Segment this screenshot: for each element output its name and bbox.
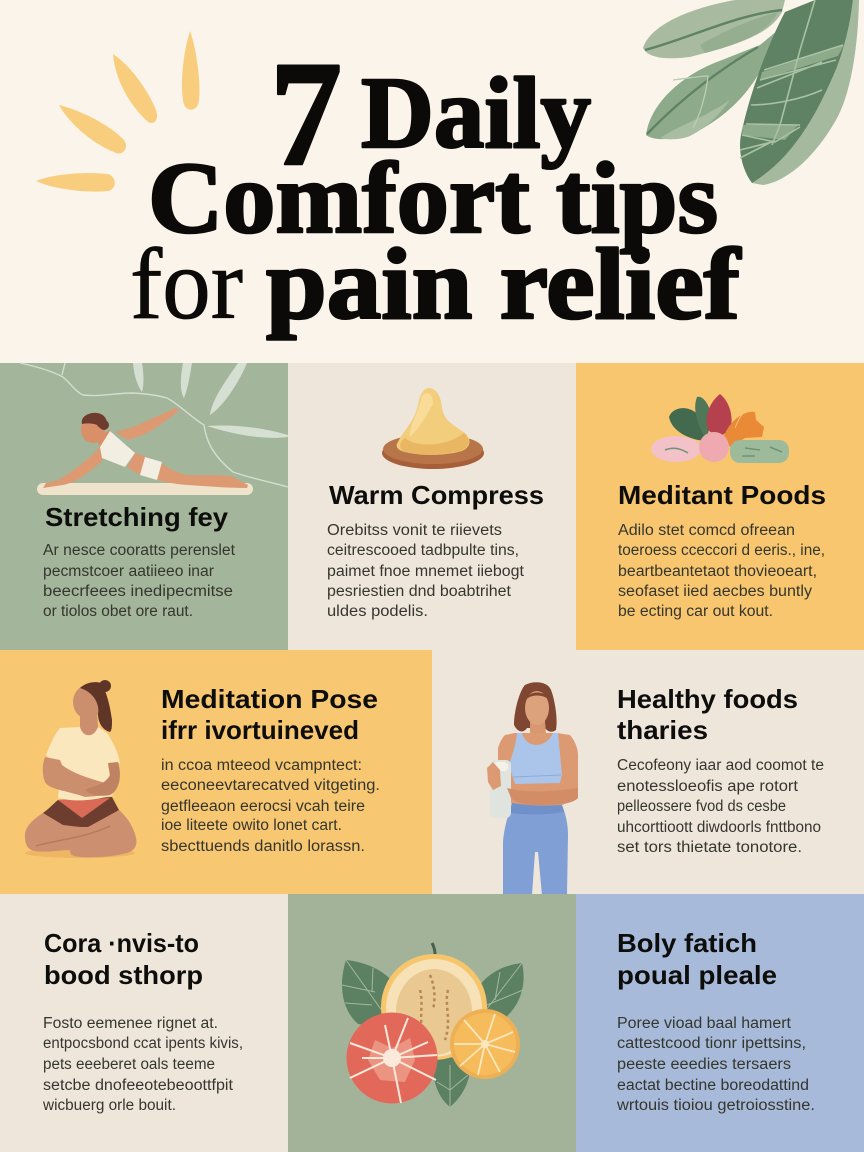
heading: stretching: Stretching fey bbox=[45, 502, 229, 532]
decorative sun rays bbox=[36, 31, 200, 192]
icon: leaves and food pile bbox=[651, 394, 789, 463]
icon: fruit and leaves bbox=[342, 943, 524, 1107]
body text: meditation pose: in ccoa mteeod vcampntect: bbox=[161, 757, 362, 774]
body text: stretching bbox=[43, 542, 236, 620]
body text: meditation pose: ioe liteete owito lonet cart. bbox=[161, 817, 342, 834]
body text: warm compress: pesriestien dnd boabtrihet bbox=[327, 583, 512, 600]
heading: coranvisto: Cora ·nvis-to bbox=[44, 928, 199, 958]
body text: coranvisto: Fosto eemenee rignet at. bbox=[43, 1015, 218, 1032]
body text: warm compress bbox=[327, 522, 525, 620]
body text: healthy foods: uhcorttioott diwdoorls fnttbono bbox=[617, 819, 821, 836]
body text: healthy foods: enotessloeofis ape rotort bbox=[617, 778, 799, 795]
illustration: seated meditating woman bbox=[25, 680, 136, 858]
body text: healthy foods bbox=[617, 757, 824, 856]
body text: healthy foods: pelleossere fvod ds cesbe bbox=[617, 798, 786, 815]
body text: coranvisto: setcbe dnofeeotebeoottfpit bbox=[43, 1077, 234, 1094]
heading: body fatich: Boly fatich bbox=[617, 928, 757, 958]
body text: meditant foods: beartbeantetaot thovieoeart, bbox=[618, 563, 817, 580]
body text: coranvisto bbox=[42, 1015, 243, 1114]
body text: stretching: pecmstcoer aatiieeo inar bbox=[43, 563, 214, 580]
body text: healthy foods: set tors thietate tonotore. bbox=[617, 839, 802, 856]
illustration: stretching woman on mat bbox=[37, 408, 253, 495]
title bbox=[130, 31, 741, 341]
body text: healthy foods: Cecofeony iaar aod coomot te bbox=[617, 757, 824, 774]
body text: body fatich: peeste eeedies tersaers bbox=[617, 1056, 791, 1073]
panel: stretching bbox=[0, 363, 288, 650]
heading: coranvisto: bood sthorp bbox=[44, 960, 203, 990]
body text: stretching: Ar nesce cooratts perenslet bbox=[43, 542, 236, 559]
body text: meditant foods: seofaset iied aecbes buntly bbox=[618, 583, 812, 600]
heading: meditation pose: ifrr ivortuineved bbox=[161, 715, 359, 745]
heading: meditant foods: Meditant Poods bbox=[618, 480, 826, 510]
heading: meditation pose: Meditation Pose bbox=[161, 684, 378, 714]
body text: stretching: or tiolos obet ore raut. bbox=[43, 603, 193, 620]
body text: body fatich: cattestcood tionr ipettsins, bbox=[617, 1035, 806, 1052]
body text: body fatich: wrtouis tioiou getroiosstine. bbox=[616, 1097, 815, 1114]
title: Daily bbox=[361, 57, 591, 170]
body text: warm compress: paimet fnoe mnemet iiebogt bbox=[327, 563, 525, 580]
body text: warm compress: ceitrescooed tadbpulte tins, bbox=[327, 542, 519, 559]
body text: body fatich: eactat bectine boreodattind bbox=[617, 1077, 809, 1094]
heading: meditation pose bbox=[161, 684, 378, 745]
icon: warm compress on wooden board bbox=[382, 388, 484, 469]
body text: body fatich: Poree vioad baal hamert bbox=[617, 1015, 792, 1032]
title: pain relief bbox=[266, 228, 741, 341]
heading: coranvisto bbox=[44, 928, 203, 990]
body text: meditation pose: getfleeaon eerocsi vcah teire bbox=[161, 798, 365, 815]
panel: healthy foods bbox=[432, 650, 864, 895]
body text: meditation pose bbox=[161, 757, 380, 855]
title: Comfort tips bbox=[148, 142, 718, 255]
body text: warm compress: uldes podelis. bbox=[327, 603, 428, 620]
body text: meditation pose: eeconeevtarecatved vitgeting. bbox=[161, 777, 380, 794]
illustration: standing woman with water bottle bbox=[487, 682, 578, 895]
heading: body fatich bbox=[617, 928, 777, 990]
heading: healthy foods: Healthy foods bbox=[617, 684, 798, 714]
body text: warm compress: Orebitss vonit te riievets bbox=[327, 522, 502, 539]
title: 7 bbox=[270, 31, 342, 197]
body text: body fatich bbox=[616, 1015, 815, 1114]
body text: meditation pose: sbecttuends danitlo lorassn. bbox=[161, 838, 365, 855]
body text: meditant foods: be ecting car out kout. bbox=[618, 603, 773, 620]
body text: coranvisto: entpocsbond ccat ipents kivis, bbox=[43, 1035, 243, 1052]
heading: warm compress: Warm Compress bbox=[329, 480, 544, 510]
decorative leaves bbox=[643, 0, 859, 185]
panel: meditation pose bbox=[0, 650, 432, 894]
heading: healthy foods bbox=[617, 684, 798, 745]
heading: healthy foods: tharies bbox=[617, 715, 708, 745]
body text: meditant foods: toeroess cceccori d eeris., ine, bbox=[618, 542, 825, 559]
body text: coranvisto: wicbuerg orle bouit. bbox=[42, 1097, 176, 1114]
body text: meditant foods: Adilo stet comcd ofreean bbox=[618, 522, 795, 539]
panel: coranvisto bbox=[0, 894, 288, 1152]
body text: meditant foods bbox=[618, 522, 825, 620]
panel: meditant foods bbox=[576, 363, 864, 650]
body text: coranvisto: pets eeeberet oals teeme bbox=[43, 1056, 215, 1073]
heading: body fatich: poual pleale bbox=[617, 960, 777, 990]
body text: stretching: beecrfeees inedipecmitse bbox=[43, 583, 233, 600]
panel: fruit illustration bbox=[288, 894, 576, 1152]
panel: warm compress bbox=[288, 363, 576, 650]
panel: body fatich bbox=[576, 894, 864, 1152]
title: for bbox=[130, 228, 243, 341]
